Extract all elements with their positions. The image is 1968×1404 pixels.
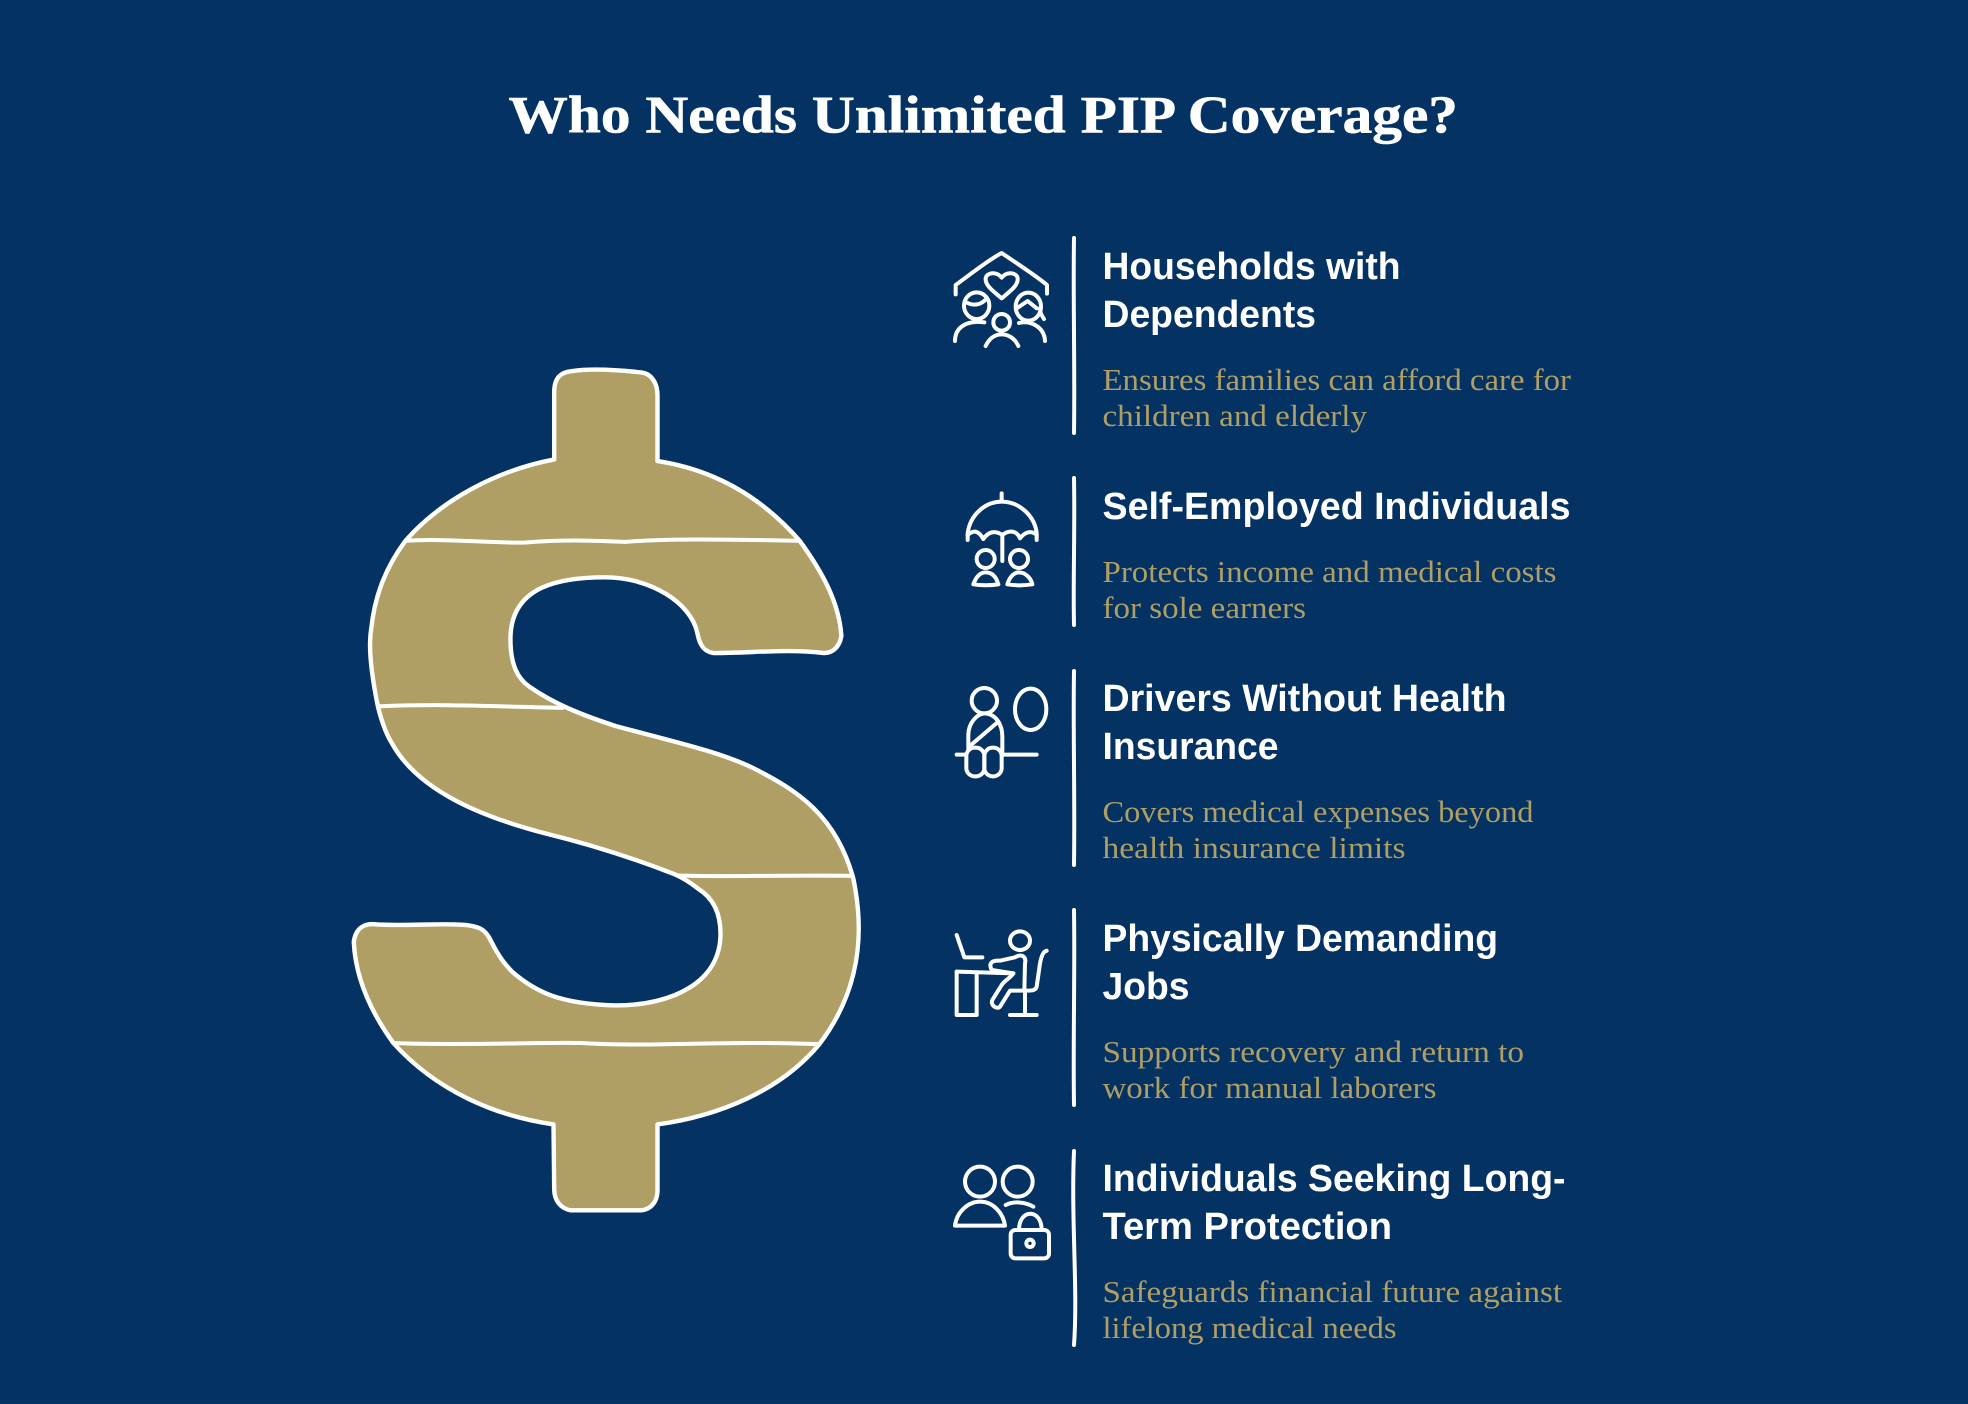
heading: Physically Demanding [1102, 918, 1498, 960]
description: Covers medical expenses beyond [1102, 795, 1534, 829]
panel: households with dependents [955, 238, 1571, 433]
description: Ensures families can afford care for [1102, 363, 1571, 397]
heading line 2: Insurance [1102, 726, 1278, 768]
icon: seated driver with seat belt [957, 688, 1046, 776]
description line 2: work for manual laborers [1102, 1071, 1436, 1105]
icon: worker at desk with laptop [957, 931, 1047, 1015]
description: Safeguards financial future against [1102, 1275, 1563, 1309]
icon: family under house roof [955, 253, 1047, 346]
description line 2: health insurance limits [1102, 831, 1406, 865]
icon: gold dollar sign divided into five bands [354, 370, 859, 1210]
panel: physically demanding jobs [957, 910, 1524, 1105]
icon: two people with padlock [955, 1167, 1049, 1258]
heading line 2: Dependents [1102, 294, 1316, 336]
heading: Households with [1102, 246, 1400, 288]
panel: drivers without health insurance [957, 671, 1534, 865]
title: Who Needs Unlimited PIP Coverage? [508, 86, 1458, 144]
heading line 2: Jobs [1102, 966, 1190, 1008]
description line 2: children and elderly [1102, 399, 1368, 433]
description: Protects income and medical costs [1102, 555, 1556, 589]
heading line 2: Term Protection [1102, 1206, 1392, 1248]
description line 2: for sole earners [1102, 591, 1306, 625]
panel: self-employed individuals [968, 478, 1570, 625]
panel: individuals seeking long-term protection [955, 1151, 1566, 1345]
description line 2: lifelong medical needs [1102, 1311, 1396, 1345]
heading: Drivers Without Health [1102, 678, 1506, 720]
heading: Individuals Seeking Long- [1102, 1158, 1566, 1200]
description: Supports recovery and return to [1102, 1035, 1524, 1069]
icon: umbrella over two people [968, 493, 1037, 585]
heading: Self-Employed Individuals [1102, 486, 1570, 528]
